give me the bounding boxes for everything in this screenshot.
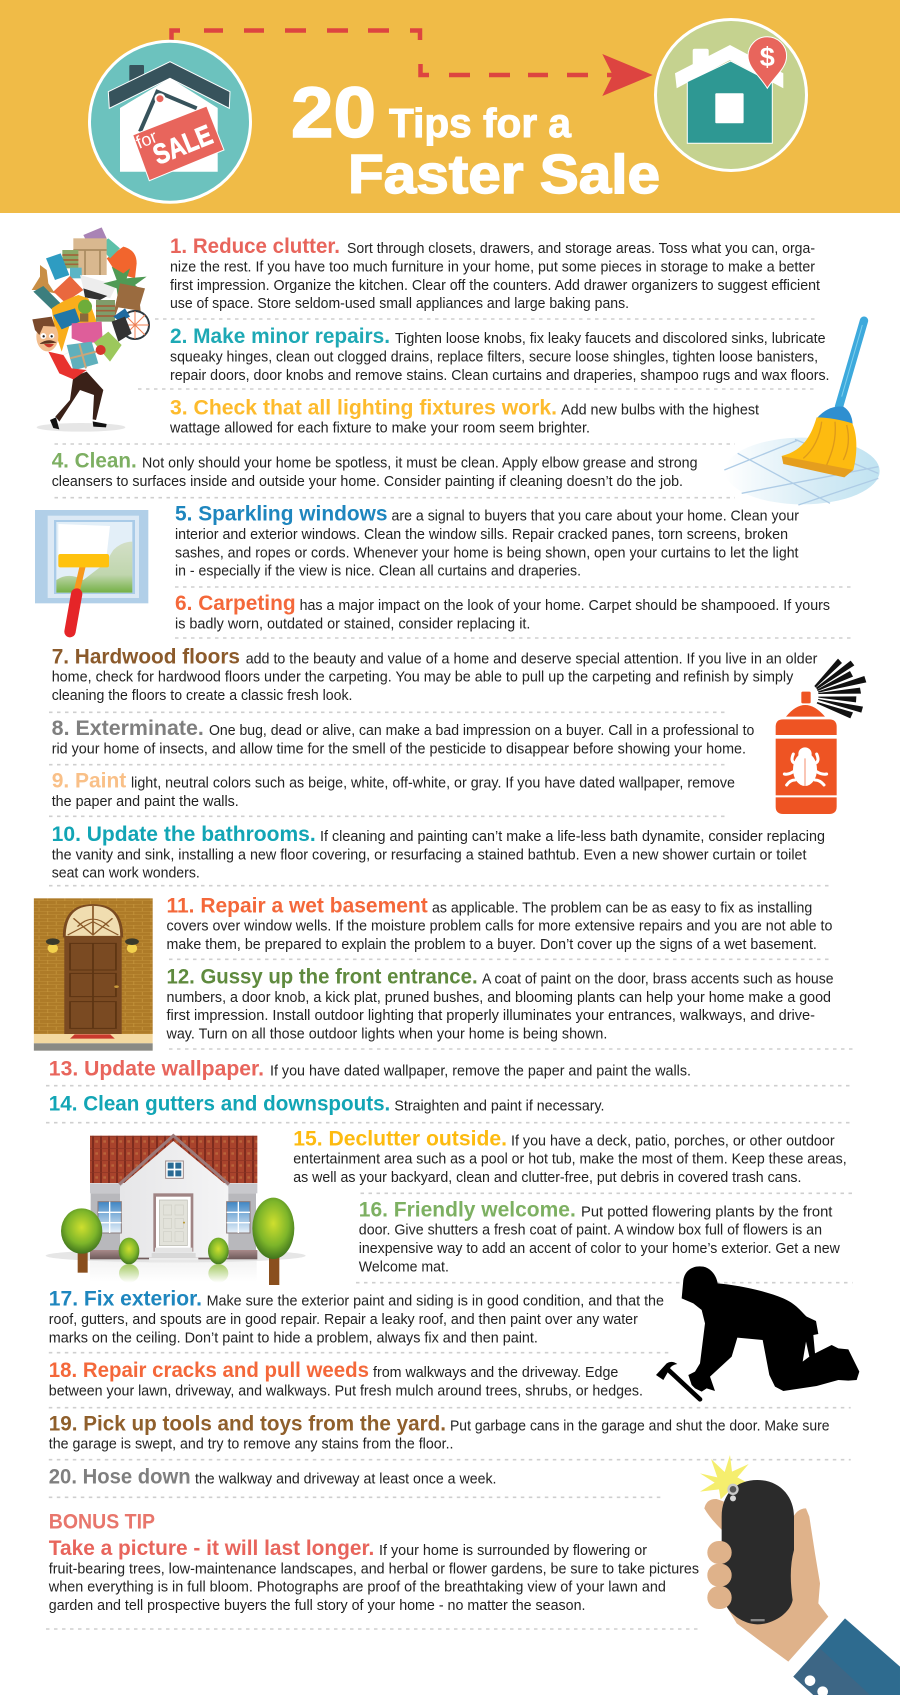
- tip 18: [49, 1359, 643, 1399]
- tip 9 body: [52, 775, 735, 810]
- tip 14 body: Straighten and paint if necessary.: [394, 1097, 604, 1114]
- tip 1 body: [170, 240, 821, 312]
- tip 20: [49, 1465, 497, 1488]
- tip 10 body: [52, 828, 825, 881]
- tip 12 body: A coat of paint on the door, brass accents such as house: [482, 971, 834, 988]
- tip 5 heading: 5. Sparkling windows: [175, 503, 388, 526]
- dashed arrow path: [172, 30, 653, 96]
- tip 1 body: Sort through closets, drawers, and storage areas. Toss what you can, orga-: [347, 240, 815, 257]
- title: Faster Sale: [348, 143, 660, 205]
- tip 15: [293, 1127, 847, 1186]
- tip 8 body: rid your home of insects, and allow time for the smell of the pesticide to disappear before showing your home.: [52, 740, 746, 757]
- tip 17: [49, 1288, 664, 1346]
- illustration: bug spray can: [776, 659, 866, 814]
- tip 10 body: the vanity and sink, installing a new floor covering, or resurfacing a stained bathtub. Even a new shower curtain or toilet: [52, 846, 807, 863]
- tip 3 heading: 3. Check that all lighting fixtures work.: [170, 396, 557, 420]
- tip 13: [49, 1058, 691, 1081]
- tip 16 body: door. Give shutters a fresh coat of paint. A window box full of flowers is an: [359, 1222, 822, 1239]
- bonus body: If your home is surrounded by flowering or: [379, 1542, 647, 1559]
- tip 2 body: repair doors, door knobs and remove stains. Clean curtains and draperies, shampoo rugs and wax floors.: [170, 367, 830, 384]
- tip 16 heading: 16. Friendly welcome.: [359, 1198, 576, 1221]
- tip 2 body: squeaky hinges, clean out clogged drains, replace filters, secure loose shingles, tighten loose banisters,: [170, 349, 818, 366]
- illustration: window and squeegee: [35, 510, 148, 632]
- tip 12 body: way. Turn on all those outdoor lights when your home is being shown.: [166, 1025, 607, 1042]
- illustration: worker silhouette with hammer: [656, 1266, 859, 1399]
- tip 6 body: has a major impact on the look of your home. Carpet should be shampooed. If yours: [300, 597, 830, 614]
- tip 2 body: Tighten loose knobs, fix leaky faucets and discolored sinks, lubricate: [395, 330, 826, 347]
- tip 17 body: roof, gutters, and spouts are in good repair. Repair a leaky roof, and then paint over any water: [49, 1311, 638, 1328]
- tip 7 body: add to the beauty and value of a home and deserve special attention. If you live in an older: [246, 650, 817, 667]
- bonus body: garden and tell prospective buyers the full story of your home - no matter the season.: [49, 1597, 586, 1614]
- tip 6: [175, 592, 830, 632]
- bonus tip: [48, 1510, 699, 1614]
- tip 5 body: in - especially if the view is nice. Clean all curtains and draperies.: [175, 563, 581, 580]
- tip 7 heading: 7. Hardwood floors: [52, 645, 240, 668]
- title: [291, 74, 660, 205]
- tip 5 body: sashes, and ropes or cords. Whenever your home is being shown, open your curtains to let the light: [175, 544, 799, 561]
- tip 12 body: [166, 971, 834, 1042]
- tip 13 body: If you have dated wallpaper, remove the paper and paint the walls.: [270, 1063, 691, 1080]
- illustration: front door on brick wall: [34, 898, 153, 1051]
- tip 17 heading: 17. Fix exterior.: [49, 1288, 202, 1311]
- tip 3 body: wattage allowed for each fixture to make your room seem brighter.: [169, 420, 590, 437]
- icon: for sale house: SALE: [149, 119, 217, 171]
- illustration: man carrying clutter: [32, 227, 149, 432]
- tip 8 heading: 8. Exterminate.: [52, 717, 204, 740]
- tip 15 heading: 15. Declutter outside.: [293, 1127, 507, 1150]
- tip 4 heading: 4. Clean.: [52, 450, 137, 473]
- tip 9 body: light, neutral colors such as beige, white, off-white, or gray. If you have dated wallpaper, remove: [131, 775, 735, 792]
- tip 1 heading: 1. Reduce clutter.: [170, 235, 340, 258]
- tip 11 body: covers over window wells. If the moisture problem calls for more extensive repairs and you are not able to: [166, 918, 832, 935]
- illustration: house with trees: [46, 1136, 306, 1285]
- tip 11 heading: 11. Repair a wet basement: [166, 894, 428, 917]
- illustration: broom on tiled floor: [724, 321, 880, 505]
- tip 6 body: [175, 597, 830, 632]
- tip 4: [52, 450, 697, 490]
- tip 5 body: are a signal to buyers that you care about your home. Clean your: [392, 508, 799, 525]
- tip 2 heading: 2. Make minor repairs.: [170, 325, 390, 348]
- bonus heading: BONUS TIP: [49, 1510, 155, 1533]
- tip 18 heading: 18. Repair cracks and pull weeds: [49, 1359, 369, 1382]
- illustration: hand holding phone with flash: [700, 1455, 900, 1695]
- tip 9: [52, 770, 735, 810]
- tip 19 body: [49, 1417, 830, 1453]
- tip 17 body: marks on the ceiling. Don’t paint to hide a problem, always fix and then paint.: [49, 1329, 538, 1346]
- tip 3 body: [169, 402, 760, 437]
- tip 18 body: [49, 1364, 643, 1399]
- tip 3: [169, 396, 760, 437]
- tip 6 heading: 6. Carpeting: [175, 592, 296, 615]
- tip 8 body: [52, 722, 754, 757]
- tip 8 body: One bug, dead or alive, can make a bad impression on a buyer. Call in a professional to: [209, 722, 754, 739]
- tip 15 body: [293, 1132, 847, 1186]
- title: 20: [291, 74, 376, 153]
- tip 15 body: as well as your backyard, clean and clutter-free, put debris in covered trash cans.: [293, 1169, 801, 1186]
- tip 19 body: Put garbage cans in the garage and shut the door. Make sure: [450, 1417, 830, 1434]
- tip 17 body: Make sure the exterior paint and siding is in good condition, and that the: [207, 1293, 664, 1310]
- tip 4 body: [52, 455, 697, 490]
- tip 1 body: nize the rest. If you have too much furniture in your home, put some pieces in storage to make a better: [170, 258, 815, 276]
- tip 20 heading: 20. Hose down: [49, 1465, 191, 1488]
- tip 7: [52, 645, 817, 704]
- tip 1 body: use of space. Store seldom-used small appliances and large baking pans.: [170, 295, 629, 312]
- tip 16 body: inexpensive way to add an accent of color to your home’s exterior. Get a new: [359, 1240, 840, 1257]
- tip 2: [170, 325, 830, 384]
- tip 18 body: between your lawn, driveway, and walkways. Put fresh mulch around trees, shrubs, or hedges.: [49, 1382, 643, 1399]
- tip 19: [49, 1412, 830, 1453]
- tip 4 body: Not only should your home be spotless, it must be clean. Apply elbow grease and strong: [142, 455, 698, 472]
- header banner: [0, 0, 900, 213]
- tip 11 body: make them, be prepared to explain the problem to a buyer. Don’t cover up the signs of a wet basement.: [166, 936, 817, 953]
- tip 1: [170, 235, 821, 312]
- tip 17 body: [49, 1293, 664, 1346]
- tip 5 body: [175, 508, 799, 580]
- tip 5 body: interior and exterior windows. Clean the window sills. Repair cracked panes, torn screens, broken: [175, 526, 788, 543]
- bonus body: fruit-bearing trees, low-maintenance landscapes, and herbal or flower gardens, be sure to take pictures: [49, 1560, 699, 1577]
- tip 6 body: is badly worn, outdated or stained, consider replacing it.: [175, 615, 530, 632]
- bonus body: [48, 1542, 699, 1614]
- tip 20 body: the walkway and driveway at least once a week.: [195, 1470, 496, 1487]
- tip 18 body: from walkways and the driveway. Edge: [373, 1364, 618, 1381]
- tip 15 body: entertainment area such as a pool or hot tub, make the most of them. Keep these areas,: [293, 1151, 847, 1168]
- tip 19 body: the garage is swept, and try to remove any stains from the floor..: [49, 1436, 454, 1453]
- icon: sold house with dollar pin: $: [760, 42, 775, 72]
- tip 9 heading: 9. Paint: [52, 770, 126, 793]
- tip 13 heading: 13. Update wallpaper.: [49, 1058, 264, 1081]
- tip 10: [52, 823, 825, 881]
- tip 2 body: [170, 330, 830, 384]
- tip 12 body: first impression. Install outdoor lighting that properly illuminates your entrances, walkways, and drive-: [166, 1007, 815, 1024]
- tip 11 body: [166, 899, 832, 953]
- tip 1 body: first impression. Organize the kitchen. Clear off the counters. Add drawer organizers to suggest efficient: [170, 277, 821, 294]
- tip 11 body: as applicable. The problem can be as easy to fix as installing: [432, 899, 812, 916]
- tip 16 body: Put potted flowering plants by the front: [581, 1203, 833, 1220]
- tip 7 body: home, check for hardwood floors under the carpeting. You may be able to pull up the carpeting and refinish by simply: [52, 669, 794, 686]
- tip 15 body: If you have a deck, patio, porches, or other outdoor: [511, 1132, 835, 1149]
- bonus body: when everything is in full bloom. Photographs are proof of the breathtaking view of your lawn and: [48, 1579, 666, 1596]
- tip 14: [49, 1092, 605, 1115]
- tip 5: [175, 503, 799, 580]
- tip 16 body: [359, 1203, 840, 1275]
- tip 3 body: Add new bulbs with the highest: [561, 402, 760, 418]
- tip 7 body: [52, 650, 817, 704]
- tip 10 heading: 10. Update the bathrooms.: [52, 823, 316, 846]
- title: Tips for a: [389, 100, 572, 146]
- tip 19 heading: 19. Pick up tools and toys from the yard.: [49, 1412, 446, 1435]
- tip 16 body: Welcome mat.: [359, 1258, 449, 1275]
- tip 16: [359, 1198, 840, 1275]
- icon: for sale house: for: [133, 126, 160, 153]
- tip 9 body: the paper and paint the walls.: [52, 793, 239, 810]
- tip 12: [166, 966, 834, 1042]
- tip 10 body: seat can work wonders.: [52, 864, 200, 881]
- bonus subheading: Take a picture - it will last longer.: [49, 1537, 374, 1560]
- icon: for sale house: [90, 41, 250, 202]
- tip 11: [166, 894, 832, 953]
- tip 10 body: If cleaning and painting can’t make a life-less bath dynamite, consider replacing: [320, 828, 825, 845]
- tip 14 heading: 14. Clean gutters and downspouts.: [49, 1092, 390, 1115]
- tip 7 body: cleaning the floors to create a classic fresh look.: [52, 687, 352, 704]
- tip 12 body: numbers, a door knob, a kick plat, pruned bushes, and blooming plants can help your home make a good: [166, 989, 831, 1006]
- tip 4 body: cleansers to surfaces inside and outside your home. Consider painting if cleaning doesn’t do the job.: [52, 473, 683, 490]
- icon: sold house with dollar pin: [656, 20, 806, 170]
- tip 12 heading: 12. Gussy up the front entrance.: [166, 966, 478, 989]
- tip 8: [52, 717, 754, 757]
